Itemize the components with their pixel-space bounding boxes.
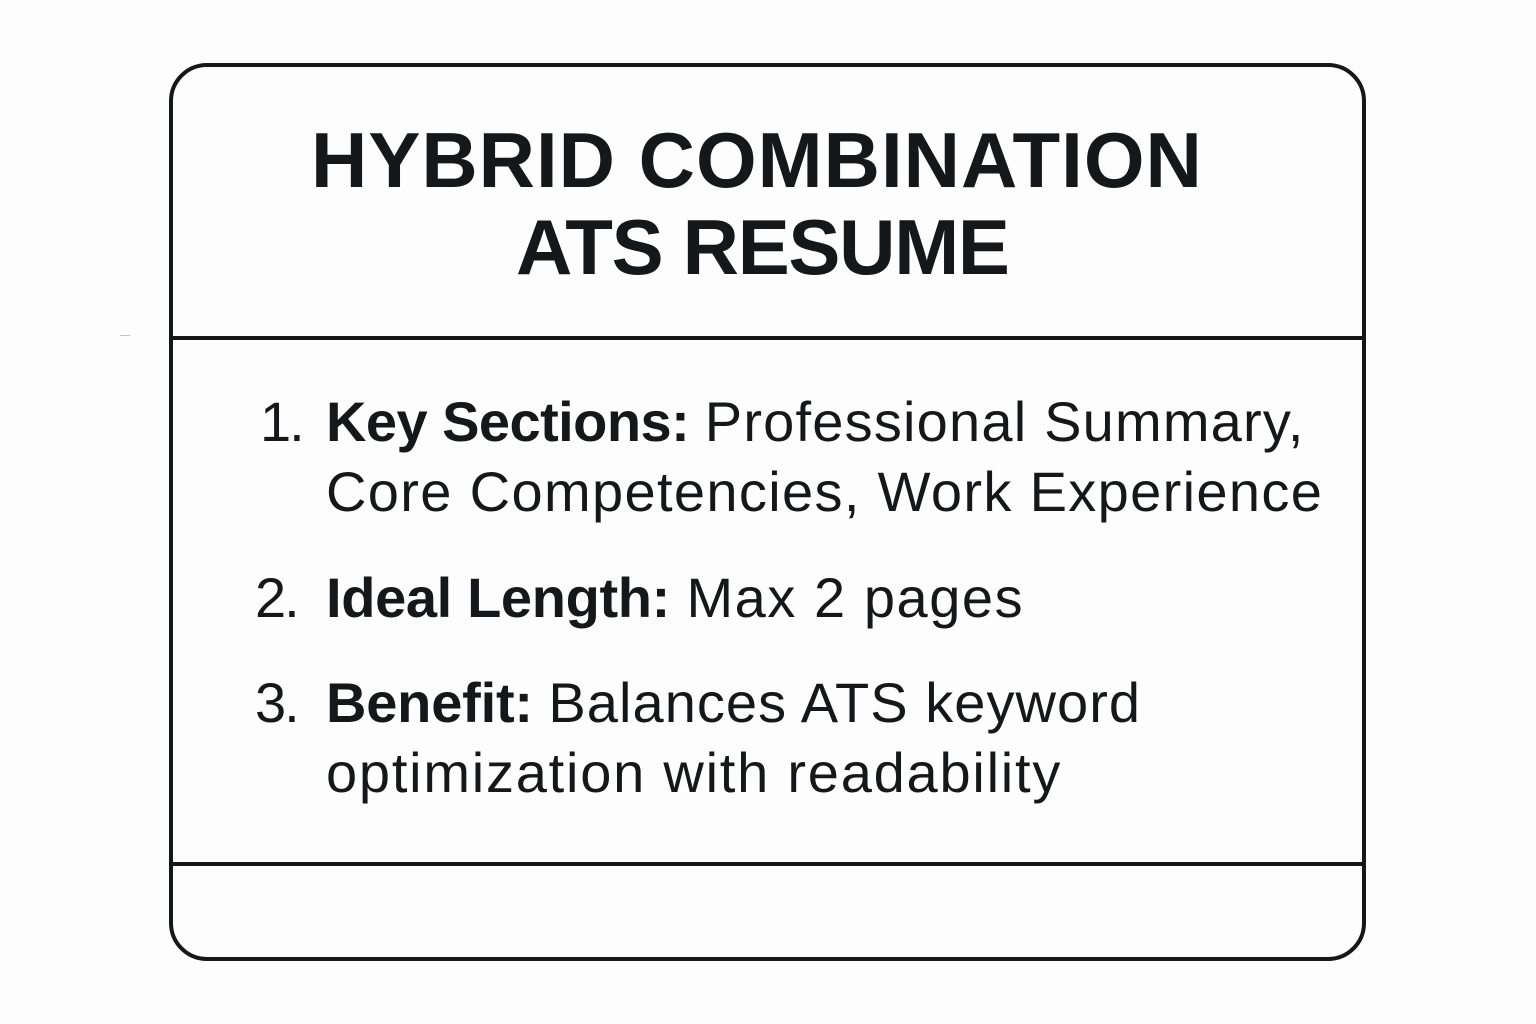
number 1: 1. [260, 390, 303, 453]
item 2 text: Ideal Length: Max 2 pages [326, 566, 1024, 629]
title [311, 116, 1203, 291]
item 1 text: Key Sections: Professional Summary, [326, 390, 1305, 453]
footer divider [172, 862, 1364, 866]
list item 1: key sections [260, 390, 1323, 523]
list item 3: benefit [255, 671, 1141, 804]
title line 1: HYBRID COMBINATION [311, 116, 1203, 204]
header divider [172, 336, 1364, 340]
number 2: 2. [255, 566, 298, 629]
card panel [169, 63, 1366, 961]
number 3: 3. [255, 671, 298, 734]
item 3 text line 2: optimization with readability [326, 741, 1062, 804]
title line 2: ATS RESUME [516, 203, 1009, 291]
list item 2: ideal length [255, 566, 1024, 629]
item 1 text line 2: Core Competencies, Work Experience [326, 460, 1323, 523]
item 3 text: Benefit: Balances ATS keyword [326, 671, 1141, 734]
